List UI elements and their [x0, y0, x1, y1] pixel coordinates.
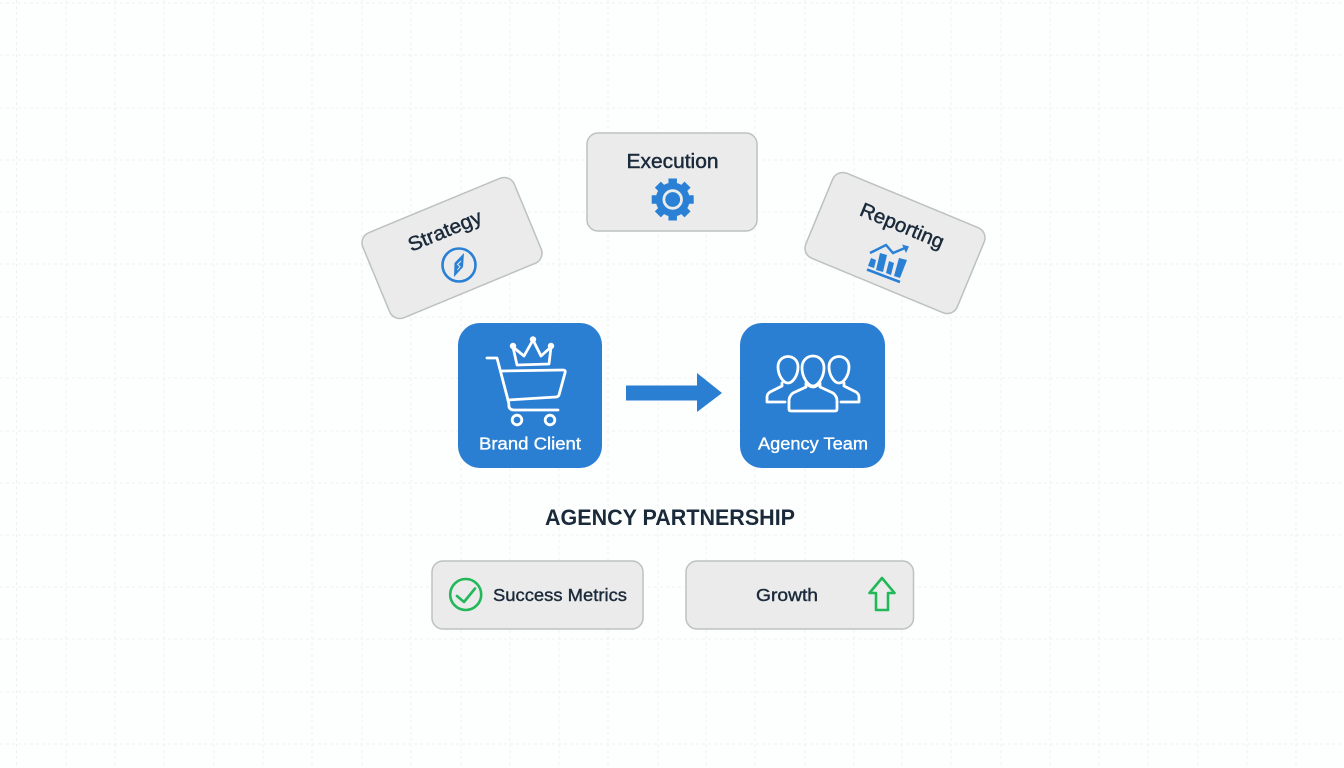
- title: AGENCY PARTNERSHIP: [545, 505, 795, 530]
- panel: Strategy card: [359, 174, 545, 322]
- label: Agency Team: Agency Team: [758, 434, 868, 454]
- label: Brand Client: Brand Client: [479, 434, 581, 454]
- panel: Brand Client: [458, 323, 602, 468]
- icon: cart with crown: [487, 338, 565, 425]
- arrow: client to agency: [626, 373, 722, 412]
- label: Reporting: Reporting: [857, 199, 947, 254]
- icon: bar chart with trend: [867, 244, 909, 282]
- panel: Success Metrics: [432, 561, 643, 629]
- panel: Reporting card: [802, 169, 988, 317]
- label: Success Metrics: Success Metrics: [493, 585, 627, 605]
- icon: check circle: [450, 579, 481, 610]
- icon: team of people: [767, 356, 859, 411]
- icon: gear: [652, 178, 694, 220]
- label: Growth: Growth: [756, 585, 818, 605]
- panel: Execution card: [587, 133, 757, 231]
- panel: Growth: [686, 561, 914, 629]
- label: Execution: Execution: [626, 151, 718, 173]
- icon: up arrow: [870, 578, 894, 610]
- panel: Agency Team: [740, 323, 885, 468]
- label: Strategy: Strategy: [405, 206, 485, 256]
- icon: compass: [442, 248, 476, 282]
